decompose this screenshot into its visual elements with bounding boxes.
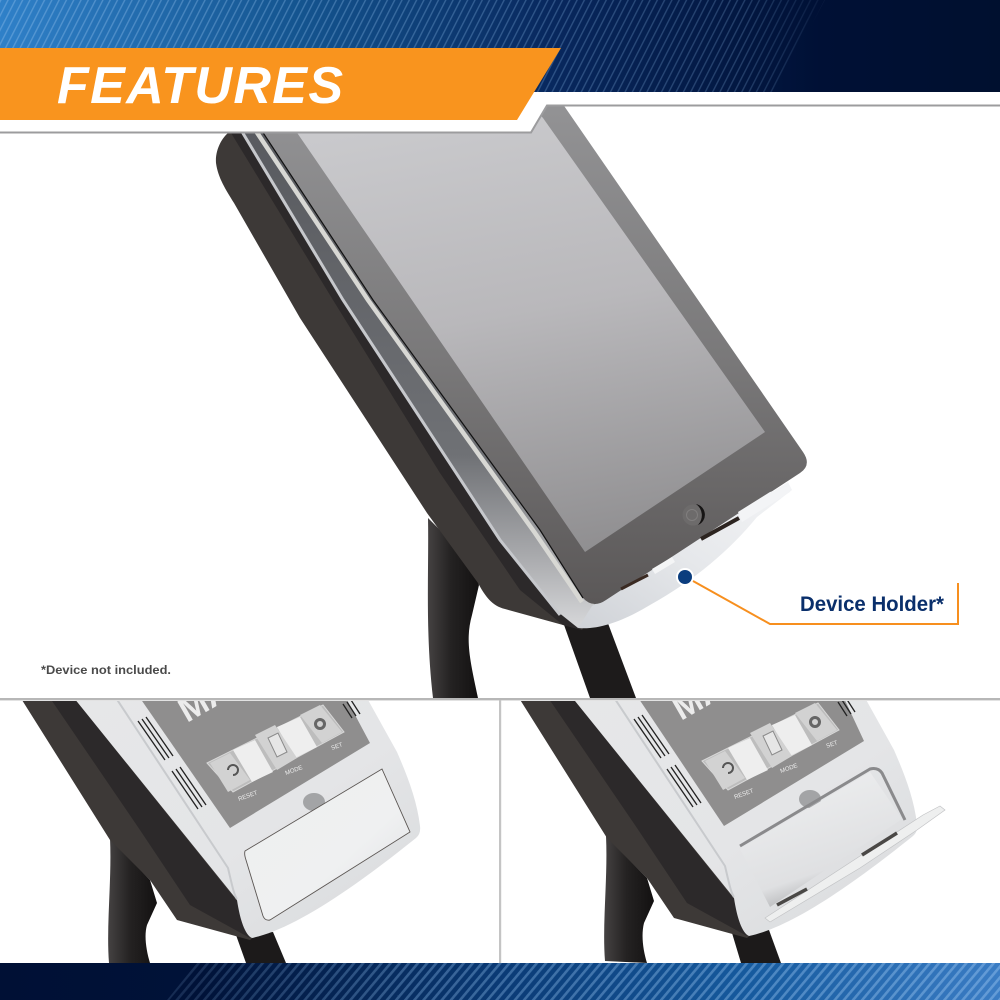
console shell [519,693,759,938]
holder lip [578,482,792,628]
thumb notch [303,793,325,811]
silver rim [241,125,596,628]
thumb notch [799,790,821,808]
vents [138,700,360,809]
logo text: MA [172,671,237,730]
title: FEATURES [57,57,343,115]
photo: tablet on device holder [216,100,807,698]
callout: device holder [676,568,958,624]
stand leg [236,932,286,963]
holder clips [620,491,772,590]
stand leg [732,930,781,963]
tablet bezel [258,100,807,604]
rim highlight inner [252,125,582,602]
console face [74,698,420,938]
face inner edge [116,698,237,899]
face inner edge [613,696,734,897]
button labels: MODE [285,765,304,777]
gray control panel [637,696,864,826]
vents [634,698,855,807]
holder roller [740,772,902,907]
home button [686,504,705,526]
rim highlight outer [241,130,560,615]
panel: open holder photo [521,701,946,963]
holder cover closed [245,769,410,920]
label: Device Holder* [800,593,945,616]
ribbon outline [0,106,1000,132]
shell dark band [50,698,250,938]
button labels [238,742,344,803]
divider: horizontal rule [0,698,1000,700]
console shell [216,125,600,630]
divider: vertical rule [499,700,501,963]
console face [571,696,917,936]
shell dark inner band [228,128,582,630]
console shell [22,695,262,940]
open flap [765,806,945,922]
top banner background [0,0,1000,92]
footnote: *Device not included. [41,663,171,677]
button labels: RESET [238,790,259,803]
bottom banner [0,963,1000,1000]
stand arm [604,836,654,963]
button labels [734,740,839,801]
shell dark band [547,696,747,936]
left stand arm [428,518,479,698]
title banner [0,48,561,120]
white header ribbon [0,92,1000,132]
tablet screen [278,100,765,552]
button strip [207,705,344,792]
recess frame [740,768,905,846]
panel: closed holder photo [22,701,420,963]
flap slots [777,833,897,905]
gray control panel [140,698,370,828]
stand arm [108,838,157,963]
right stand arm [563,618,636,698]
button labels: RESET [734,788,755,801]
button labels: SET [826,740,839,750]
button labels: MODE [780,763,799,775]
leader line [693,581,958,624]
bezel left edge line [258,125,583,598]
button strip [702,703,839,790]
marker dot [676,568,694,586]
button labels: SET [331,742,344,752]
logo text: MA [666,669,731,728]
